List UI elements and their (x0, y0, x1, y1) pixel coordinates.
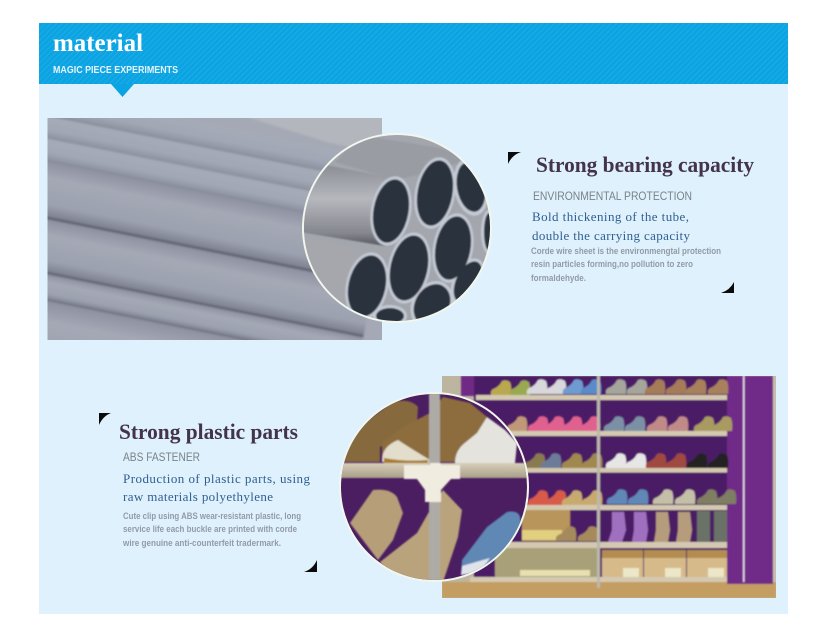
corner mark (304, 560, 317, 572)
blue shoe (461, 512, 522, 575)
text block: strong bearing capacity (508, 152, 754, 293)
shelf rail (335, 463, 535, 478)
shoes row 1 (491, 379, 728, 395)
lead line 2: raw materials polyethylene (123, 489, 273, 504)
panel: light blue background (39, 84, 788, 614)
text block: strong plastic parts (99, 413, 317, 572)
white shoe (455, 417, 517, 463)
photo: steel tubes (48, 118, 382, 340)
heading: Strong bearing capacity (536, 152, 754, 177)
upright pole (429, 390, 440, 590)
lead line 2: double the carrying capacity (532, 228, 690, 243)
rack side cover (727, 376, 773, 584)
shoes row 4 (528, 489, 736, 505)
description line 3: wire genuine anti-counterfeit tradermark. (122, 538, 281, 548)
subheading: ENVIRONMENTAL PROTECTION (533, 189, 692, 203)
subheading: ABS FASTENER (123, 450, 200, 464)
photo: shoe rack (442, 376, 776, 598)
magnified circle: tube ends (302, 133, 492, 323)
description line 1: Corde wire sheet is the environmengtal protection (531, 246, 721, 256)
description line 3: formaldehyde. (531, 273, 586, 283)
corner mark (721, 282, 734, 293)
lead line 1: Bold thickening of the tube, (532, 209, 689, 224)
shoes row 5: sandals and boots (522, 510, 727, 542)
tube bodies (336, 138, 462, 178)
banner pointer (111, 84, 134, 97)
description line 2: service life each buckle are printed with corde (123, 524, 297, 534)
lower left heel (350, 490, 403, 560)
left brown shoe (338, 401, 418, 462)
shelves (470, 376, 727, 588)
banner subtitle: MAGIC PIECE EXPERIMENTS (53, 64, 178, 76)
heading: material: material (53, 30, 143, 57)
lower right heel (380, 490, 462, 585)
shoe sole (382, 440, 430, 463)
shoes row 2 (507, 416, 732, 431)
description line 2: resin particles forming,no pollution to zero (531, 259, 694, 269)
rims and holes (344, 156, 489, 321)
heading: Strong plastic parts (119, 419, 298, 444)
header banner (39, 23, 788, 97)
magnified circle: plastic joint (335, 390, 535, 590)
white T joint (404, 463, 460, 502)
corner mark (99, 413, 111, 425)
shoes row 3 (525, 453, 728, 468)
storage boxes (495, 547, 727, 577)
description line 1: Cute clip using ABS wear-resistant plastic, long (123, 511, 301, 521)
lead line 1: Production of plastic parts, using (123, 471, 310, 486)
middle brown shoe (382, 397, 487, 462)
corner mark (508, 152, 521, 164)
